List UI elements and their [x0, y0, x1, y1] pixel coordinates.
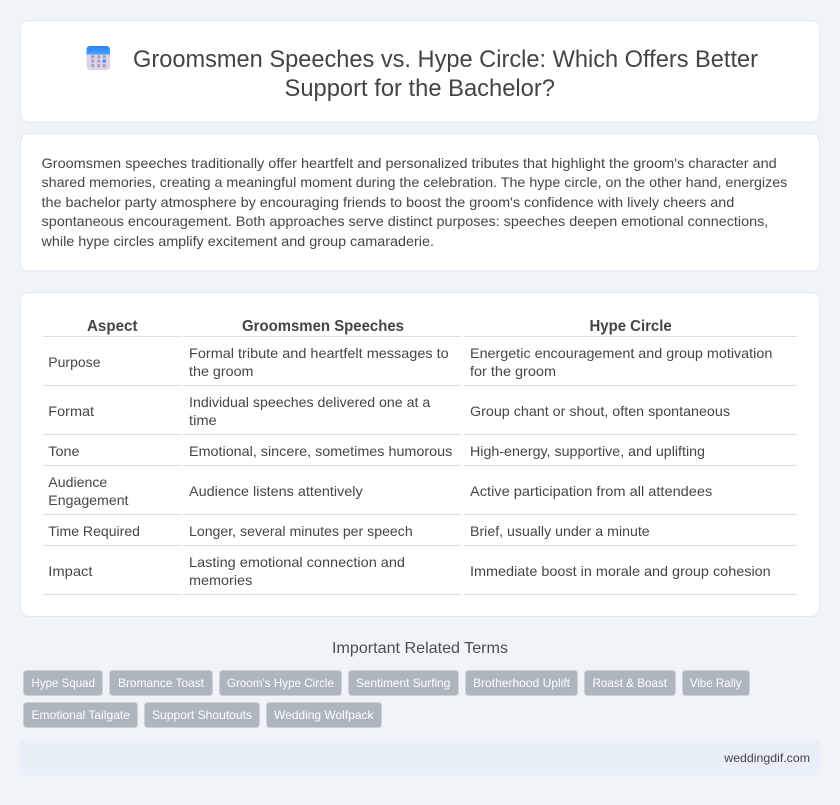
intro text block: while hype circles amplify excitement and group camaraderie.: [40, 233, 434, 249]
tag: Emotional Tailgate: Emotional Tailgate: [32, 708, 130, 722]
row: format: [48, 394, 730, 428]
footer bar: weddingdif.com: [723, 751, 810, 765]
row: audience engagement: Audience: [48, 474, 108, 490]
row: impact: Lasting emotional connection and: [189, 554, 405, 570]
row: audience engagement: Active participation from all attendees: [470, 483, 712, 499]
row: time required: [48, 523, 650, 539]
tag: Emotional Tailgate: [24, 702, 138, 728]
row: purpose: Purpose: [48, 354, 101, 370]
tag: Brotherhood Uplift: Brotherhood Uplift: [473, 676, 571, 690]
panel: title header: [20, 20, 820, 122]
row: impact: Immediate boost in morale and group cohesion: [470, 563, 771, 579]
table header row: Groomsmen Speeches: [242, 318, 404, 335]
title: [133, 46, 758, 102]
panel: comparison table: [20, 292, 820, 616]
intro text block: Groomsmen speeches traditionally offer heartfelt and personalized tributes that highlight the groom's character and: [42, 155, 777, 171]
intro text block: the bachelor party atmosphere by encouraging friends to boost the groom's confidence with lively cheers and: [42, 194, 734, 210]
table header row: Hype Circle: [590, 318, 672, 335]
row: tone: [48, 443, 705, 459]
panel: introduction: [20, 134, 820, 271]
tag: Sentiment Surfing: [348, 670, 458, 696]
tag: Groom's Hype Circle: [220, 670, 342, 696]
row: purpose: for the groom: [470, 363, 556, 379]
row: purpose: Energetic encouragement and group motivation: [470, 345, 772, 361]
tag: Bromance Toast: [110, 670, 212, 696]
tag: Support Shoutouts: [144, 702, 260, 728]
tag: Roast & Boast: [584, 670, 676, 696]
tag: Support Shoutouts: Support Shoutouts: [152, 708, 252, 722]
intro text block: spontaneous encouragement. Both approaches serve distinct purposes: speeches deepen emotional connections,: [42, 213, 768, 229]
table header row: [87, 318, 672, 335]
row: tone: High-energy, supportive, and uplifting: [470, 443, 705, 459]
table header row: Aspect: [87, 318, 138, 335]
tag: Sentiment Surfing: Sentiment Surfing: [356, 676, 450, 690]
title: Groomsmen Speeches vs. Hype Circle: Which Offers Better: [133, 46, 758, 73]
row: format: Format: [48, 403, 94, 419]
title: Support for the Bachelor?: [284, 75, 555, 102]
row: purpose: Formal tribute and heartfelt messages to: [189, 345, 449, 361]
tag: Wedding Wolfpack: [266, 702, 382, 728]
tag: Vibe Rally: [682, 670, 750, 696]
tag: Hype Squad: Hype Squad: [32, 676, 95, 690]
row: audience engagement: Engagement: [48, 492, 129, 508]
row: audience engagement: Audience listens attentively: [189, 483, 363, 499]
row: format: Group chant or shout, often spontaneous: [470, 403, 730, 419]
footer bar: [20, 741, 820, 775]
related term tags: [24, 670, 750, 728]
row: audience engagement: [48, 474, 712, 508]
tag: Vibe Rally: Vibe Rally: [690, 676, 742, 690]
intro text block: [40, 155, 787, 249]
row: impact: Impact: [48, 563, 93, 579]
row: time required: Longer, several minutes per speech: [189, 523, 413, 539]
row: impact: [48, 554, 771, 588]
row: format: time: [189, 412, 217, 428]
row: purpose: the groom: [189, 363, 254, 379]
tag: Roast & Boast: Roast & Boast: [592, 676, 668, 690]
intro text block: shared memories, creating a meaningful moment during the celebration. The hype circle, on the other hand, energizes: [42, 174, 787, 190]
tag: Brotherhood Uplift: [466, 670, 578, 696]
row: time required: Brief, usually under a minute: [470, 523, 650, 539]
row: tone: Emotional, sincere, sometimes humorous: [189, 443, 452, 459]
row: time required: Time Required: [48, 523, 140, 539]
icon: calendar: [86, 46, 110, 70]
row: format: Individual speeches delivered one at a: [189, 394, 431, 410]
row: tone: Tone: [48, 443, 80, 459]
row: impact: memories: [189, 572, 252, 588]
tag: Groom's Hype Circle: Groom's Hype Circle: [227, 676, 334, 690]
tag: Hype Squad: [24, 670, 102, 696]
heading: related terms: Important Related Terms: [332, 640, 508, 657]
row: purpose: [48, 345, 772, 379]
tag: Wedding Wolfpack: Wedding Wolfpack: [274, 708, 374, 722]
tag: Bromance Toast: Bromance Toast: [118, 676, 205, 690]
